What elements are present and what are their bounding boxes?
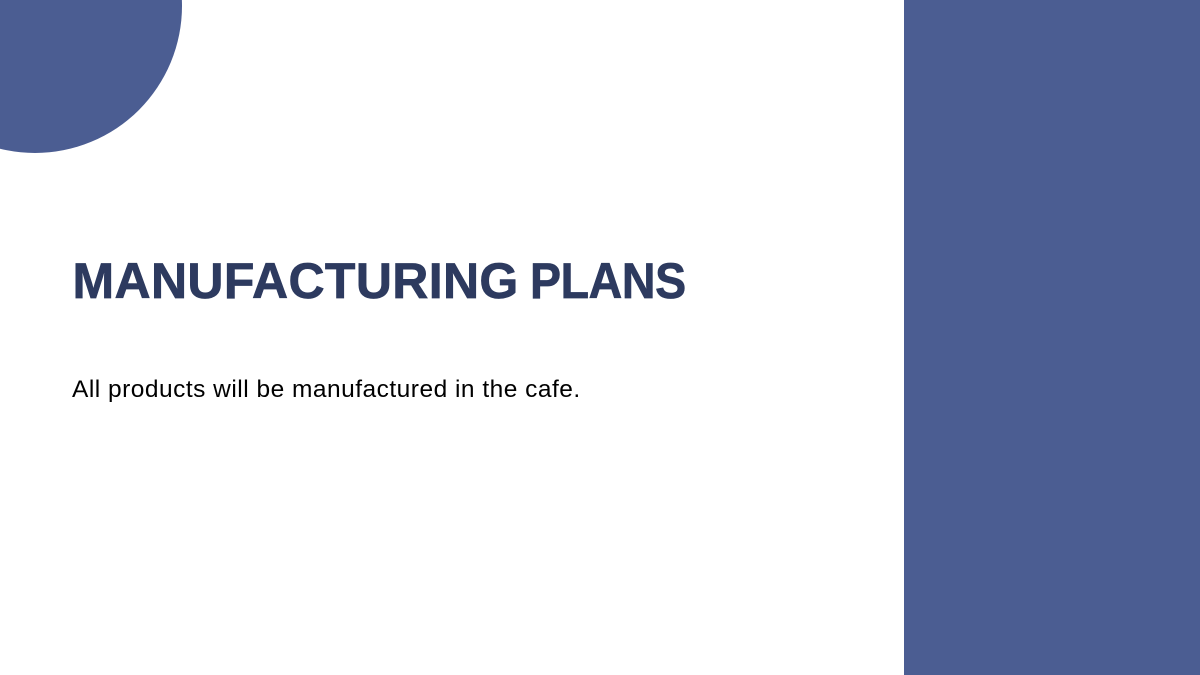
title: MANUFACTURING xyxy=(72,253,519,309)
text block: description: All products will be manufactured in the cafe. xyxy=(72,376,581,403)
panel: right blue column xyxy=(904,0,1200,675)
decorative circle: top-left xyxy=(0,0,182,153)
title: PLANS xyxy=(530,253,686,309)
